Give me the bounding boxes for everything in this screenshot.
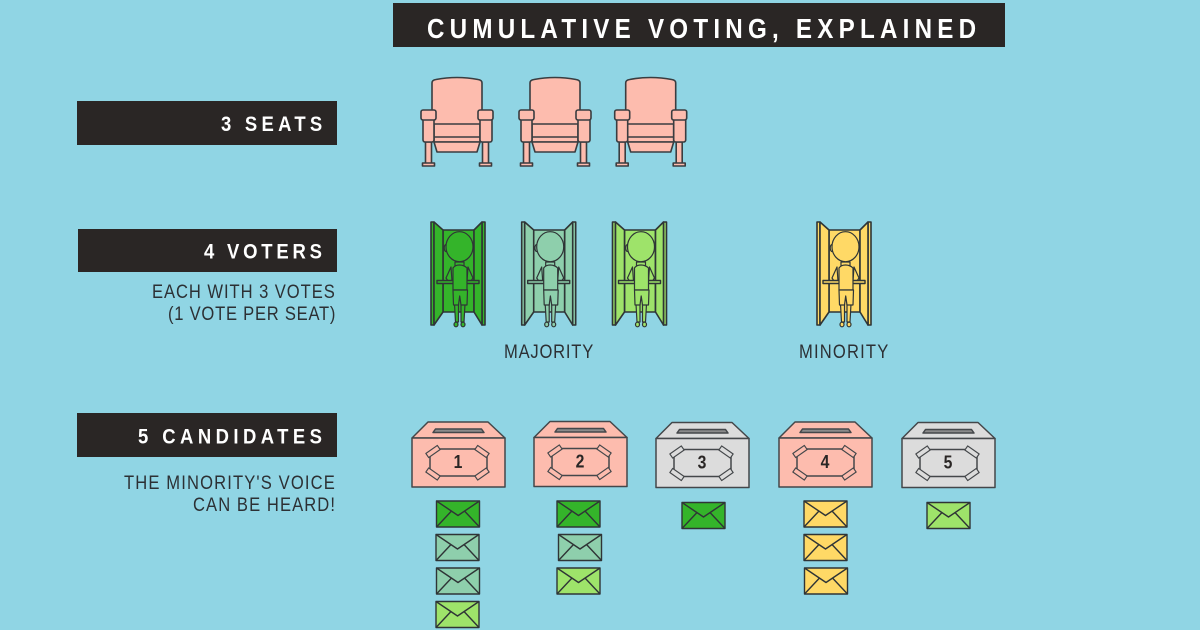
ballot box 4: 4 [821,451,830,472]
envelopes: candidate 1 [436,501,480,628]
ballot box 2 [534,422,627,486]
icon: voter dark green [431,222,485,327]
envelopes: candidate 2 [557,501,602,594]
ballot box 1 [412,422,505,487]
heading: 4 voters [78,229,337,272]
text: the minority's voice can be heard [124,472,335,515]
heading: 5 candidates [77,413,337,457]
icon: voter light green [612,222,666,327]
label: majority: MAJORITY [504,341,593,362]
title: CUMULATIVE VOTING, EXPLAINED [427,15,976,44]
heading: 5 candidates: 5 CANDIDATES [138,425,322,449]
label: minority: MINORITY [799,341,888,362]
icon: seat 2 [519,78,591,166]
ballot box 2: 2 [576,450,584,472]
icon: seat 3 [615,78,687,166]
ballot box 1: 1 [454,451,463,472]
ballot box 5: 5 [944,451,953,473]
icon: seat 1 [421,78,493,166]
ballot box 3: 3 [698,451,706,473]
text: each with 3 votes: EACH WITH 3 VOTES [152,281,335,302]
heading: 4 voters: 4 VOTERS [204,240,322,264]
heading: 3 seats: 3 SEATS [221,113,322,136]
text: the minority's voice can be heard: THE MINORITY'S VOICE [124,472,335,493]
text: the minority's voice can be heard: CAN BE HEARD! [193,494,335,515]
heading: 3 seats [77,101,337,145]
envelopes: candidate 3 [682,502,725,528]
icon: voter mint [522,222,576,327]
icon: voter yellow [817,222,871,327]
text: each with 3 votes: (1 VOTE PER SEAT) [168,303,335,324]
envelopes: candidate 4 [804,501,848,594]
icons: three seats [421,78,687,166]
ballot box 5 [902,422,995,488]
text: each with 3 votes [152,281,335,324]
title [393,3,1005,47]
ballot box 3 [656,422,749,488]
ballot box 4 [779,422,872,487]
envelopes: candidate 5 [927,502,970,528]
